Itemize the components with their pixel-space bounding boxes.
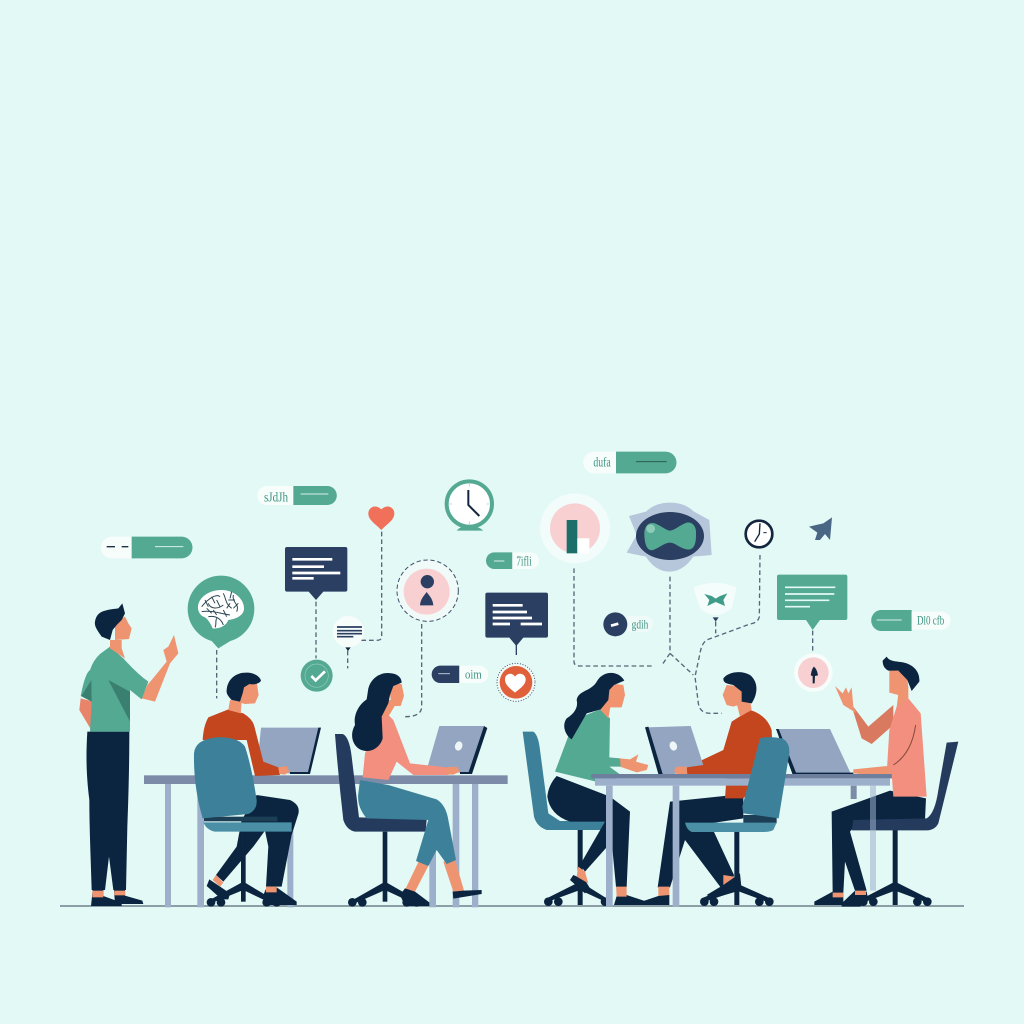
label pill: top center — [583, 452, 676, 473]
speech bubble: navy left — [285, 547, 347, 600]
woman lower legs — [405, 859, 464, 892]
woman shoes — [400, 888, 482, 906]
laptop left — [257, 728, 321, 774]
person: man in red, torso — [687, 672, 773, 798]
speech bubble: teal — [777, 575, 847, 630]
red man shoes — [207, 879, 297, 905]
label pill: right: Dl0 cfb — [917, 614, 944, 628]
right table scene — [523, 657, 958, 907]
desk top left — [144, 775, 508, 784]
red man hair — [227, 673, 261, 702]
desk legs left — [165, 784, 478, 907]
desk leg right, front — [870, 786, 876, 891]
icon: brain badge — [188, 576, 254, 648]
label pill: navy: oim — [465, 667, 482, 681]
standing man raised arm — [142, 635, 178, 702]
icon: shield bow — [693, 583, 737, 622]
icons and connectors, right half — [485, 452, 951, 713]
woman hair — [352, 673, 402, 751]
standing man rear arm — [79, 698, 93, 731]
speech bubble: navy right — [485, 593, 548, 646]
chair: teal left — [523, 732, 609, 906]
woman sweater — [555, 709, 621, 785]
laptop right — [776, 729, 853, 775]
desk right — [591, 774, 902, 906]
chair: navy center — [335, 734, 427, 907]
left table scene — [79, 603, 508, 907]
label pill: top center: dufa — [593, 455, 611, 470]
icon: small clock — [746, 521, 772, 547]
chair: navy right — [852, 742, 958, 906]
woman shoes — [570, 875, 647, 905]
man arm on desk — [853, 766, 893, 774]
woman hair — [564, 673, 624, 739]
chair: teal right — [685, 737, 789, 906]
woman trousers — [358, 780, 456, 866]
icon: heart badge — [497, 663, 535, 701]
solid tail to heart badge — [514, 645, 518, 655]
man raised arm — [853, 705, 893, 744]
person: woman in salmon, seated — [352, 673, 482, 906]
red man neck and face — [228, 683, 259, 713]
icon: paper plane — [809, 517, 832, 540]
red man hand — [674, 767, 687, 774]
man neck and face — [889, 670, 908, 707]
woman hand — [620, 754, 648, 772]
woman neck and face — [600, 683, 625, 718]
small note bubble — [333, 616, 364, 651]
red man neck and face — [723, 685, 752, 717]
person: standing man upper body — [79, 603, 178, 732]
person: standing man — [87, 732, 143, 906]
person: man in red, seated — [203, 673, 299, 905]
woman hand — [446, 767, 460, 775]
laptop middle — [645, 726, 703, 774]
icon: check badge — [301, 660, 333, 692]
ground line — [60, 905, 964, 907]
dashed connectors left — [217, 532, 422, 717]
woman torso and arm — [363, 715, 448, 780]
standing man hair — [95, 603, 125, 640]
red man legs — [216, 795, 299, 887]
icons and connectors, left half — [101, 481, 539, 717]
man shirt — [887, 698, 927, 797]
red man hand — [278, 766, 289, 775]
red man torso — [203, 709, 280, 776]
label pill: dashes — [101, 537, 192, 558]
icon: pink figure badge — [794, 653, 833, 692]
red man hair — [723, 672, 756, 703]
chair: blue left — [194, 737, 292, 907]
man legs — [832, 791, 926, 893]
icon: pink chart badge — [540, 493, 610, 563]
label: minus badge: gdih — [632, 618, 649, 632]
label pill: top left — [257, 486, 337, 505]
label pill: top left: sJdJh — [264, 490, 288, 505]
laptop center — [427, 726, 487, 774]
standing man shoes — [91, 890, 143, 906]
label pill: teal short: 7ifli — [516, 553, 532, 568]
standing man neck and face — [110, 617, 132, 658]
icon: person circle — [397, 560, 458, 621]
man raised hand — [835, 686, 857, 713]
icon: wall clock — [447, 481, 492, 531]
label: minus badge — [603, 612, 653, 636]
man hair — [883, 657, 919, 691]
person: woman in green — [547, 673, 648, 905]
woman legs — [547, 776, 630, 887]
label pill: teal short — [486, 552, 539, 569]
icon: heart — [368, 506, 394, 530]
label pill: navy — [432, 666, 488, 683]
person: man in red, lower body — [642, 794, 743, 905]
label pill: right — [871, 610, 951, 631]
person: man in salmon — [814, 657, 927, 907]
standing man legs — [87, 732, 129, 890]
standing man shirt — [81, 647, 148, 732]
woman neck and face — [382, 683, 404, 717]
red man shoes — [642, 873, 742, 905]
icon: bow badge — [627, 503, 712, 572]
dashed connectors right — [574, 555, 813, 713]
man shoes — [814, 891, 868, 907]
